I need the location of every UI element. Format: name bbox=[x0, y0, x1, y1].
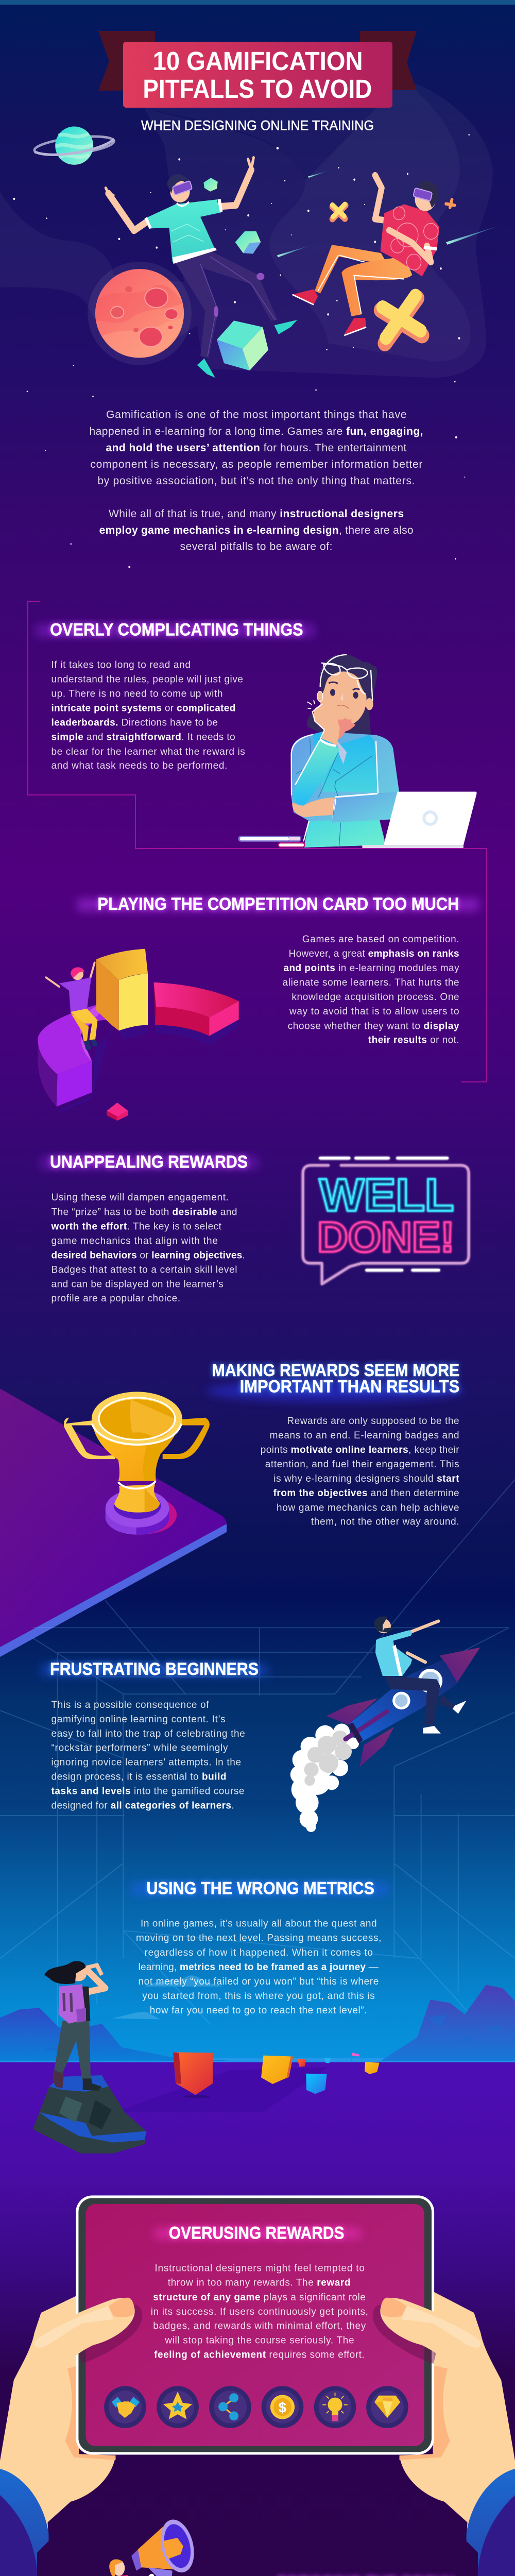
banner plate bbox=[123, 42, 392, 108]
text: using the wrong metrics: regardless of how it happened. When it comes to bbox=[145, 1947, 373, 1958]
text: unappealing rewards bbox=[50, 1192, 245, 1304]
text: competition card bbox=[282, 934, 459, 1046]
text: overly complicating things: intricate point systems or complicated bbox=[52, 703, 235, 714]
heading: playing the competition card: PLAYING THE COMPETITION CARD TOO MUCH bbox=[97, 894, 459, 914]
text: unappealing rewards: Using these will dampen engagement. bbox=[52, 1192, 229, 1203]
rider bbox=[438, 1694, 467, 1714]
text: frustrating beginners: design process, it is essential to build bbox=[52, 1772, 227, 1783]
text: unappealing rewards: Badges that attest to a certain skill level bbox=[52, 1264, 237, 1276]
landscape bbox=[0, 1985, 515, 2112]
platform: trophy stand bbox=[0, 1388, 227, 1657]
icon: diamond bbox=[366, 2386, 408, 2428]
yellow block bbox=[96, 949, 148, 1031]
text: frustrating beginners: This is a possible consequence of bbox=[52, 1700, 209, 1710]
text: making rewards: them, not the other way around. bbox=[311, 1517, 459, 1528]
intro text: Gamification is one of the most important things that have bbox=[106, 409, 407, 421]
mountains left bbox=[0, 2008, 230, 2061]
icon: light bulb bbox=[314, 2386, 356, 2428]
icon: handshake bbox=[104, 2386, 146, 2428]
text: unappealing rewards: profile are a popular choice. bbox=[52, 1293, 180, 1304]
text: making rewards: is why e-learning designers should start bbox=[273, 1473, 459, 1484]
text: making rewards: Rewards are only supposed to be the bbox=[287, 1416, 459, 1427]
text: overly complicating things: leaderboards. Directions have to be bbox=[52, 718, 218, 728]
text: making rewards: points motivate online learners, keep their bbox=[261, 1445, 459, 1455]
hero nebula and stars bbox=[0, 65, 493, 568]
text: overusing rewards: will stop taking the course seriously. The bbox=[164, 2335, 354, 2346]
text: using the wrong metrics bbox=[136, 1919, 381, 2016]
text: making rewards bbox=[261, 1416, 459, 1528]
purple block bbox=[38, 1001, 112, 1107]
text: overly complicating things: simple and straightforward. It needs to bbox=[52, 732, 235, 743]
tablet bbox=[76, 2195, 434, 2455]
text: competition card: choose whether they want to display bbox=[288, 1021, 459, 1031]
megaphone bbox=[131, 2516, 199, 2576]
intro text: employ game mechanics in e-learning design, there are also bbox=[99, 524, 414, 536]
figure bbox=[82, 1970, 105, 1993]
text: frustrating beginners: easy to fall into the trap of celebrating the bbox=[52, 1728, 245, 1739]
text: competition card: way to avoid that is to allow users to bbox=[289, 1006, 459, 1017]
rock bbox=[33, 2075, 146, 2154]
text: unappealing rewards: game mechanics that align with the bbox=[52, 1235, 218, 1246]
illustration: hand, left, back bbox=[0, 2295, 115, 2576]
planet: ringed bbox=[33, 127, 115, 165]
ribbon left bbox=[98, 31, 155, 91]
icon: coin: $ bbox=[279, 2399, 287, 2415]
rocket bbox=[326, 1698, 377, 1724]
person: red shirt VR bbox=[293, 175, 439, 335]
subtitle: WHEN DESIGNING ONLINE TRAINING bbox=[141, 117, 374, 133]
text: competition card: and points in e-learning modules may bbox=[283, 963, 459, 974]
illustration: rocket rider bbox=[290, 1616, 480, 1832]
heading: overly complicating things: OVERLY COMPLICATING THINGS bbox=[50, 620, 303, 639]
neon frame bbox=[303, 1165, 469, 1284]
text: using the wrong metrics: not merely “you failed or you won” but “this is where bbox=[138, 1976, 379, 1987]
text: overly complicating things: be clear for the learner what the reward is bbox=[52, 747, 245, 757]
illustration: chart blocks with person bbox=[38, 949, 239, 1112]
small pink cube bbox=[107, 1103, 128, 1121]
text: overusing rewards: badges, and rewards with minimal effort, they bbox=[153, 2320, 366, 2331]
neon dashes bbox=[320, 1158, 448, 1270]
text: making rewards: how game mechanics can help achieve bbox=[277, 1502, 459, 1513]
illustration: books and laptop bbox=[278, 792, 477, 848]
text: using the wrong metrics: learning, metrics need to be framed as a journey — bbox=[138, 1962, 379, 1973]
text: overusing rewards: Instructional designers might feel tempted to bbox=[154, 2263, 365, 2274]
text: frustrating beginners: ignoring novice learners’ attempts. In the bbox=[52, 1757, 241, 1768]
text: competition card: knowledge acquisition process. One bbox=[291, 992, 459, 1003]
person: teal shirt VR bbox=[106, 158, 297, 378]
text: competition card: However, a great emphasis on ranks bbox=[289, 948, 459, 959]
text: overly complicating things bbox=[52, 659, 245, 771]
text: overly complicating things: understand the rules, people will just give bbox=[52, 674, 243, 685]
badge: red bbox=[173, 2052, 213, 2098]
heading: frustrating beginners: FRUSTRATING BEGINNERS bbox=[50, 1659, 259, 1679]
heading: making rewards bbox=[206, 1361, 464, 1401]
text: competition card: alienate some learners. That hurts the bbox=[282, 977, 459, 988]
heading: unappealing rewards: UNAPPEALING REWARDS bbox=[50, 1152, 248, 1172]
illustration: woman with megaphone bbox=[107, 2516, 199, 2576]
pink block bbox=[153, 982, 239, 1036]
x shapes bbox=[332, 199, 455, 343]
text: unappealing rewards: The “prize” has to be both desirable and bbox=[52, 1207, 237, 1217]
intro text: component is necessary, as people remember information better bbox=[90, 459, 422, 470]
reward icons bbox=[104, 2386, 408, 2428]
text: frustrating beginners: “rockstar performers” while seemingly bbox=[52, 1742, 228, 1754]
text: frustrating beginners: gamifying online learning content. It’s bbox=[52, 1714, 226, 1725]
text: making rewards: attention, and fuel their engagement. This bbox=[265, 1459, 459, 1470]
icon: star bbox=[157, 2386, 199, 2428]
text: unappealing rewards: worth the effort. The key is to select bbox=[50, 1221, 222, 1232]
badge: blue bbox=[306, 2074, 327, 2094]
neon word: well: WELL bbox=[319, 1169, 454, 1221]
text: frustrating beginners: designed for all categories of learners. bbox=[52, 1801, 234, 1811]
icon: coin bbox=[262, 2386, 303, 2428]
small badges and flag bbox=[297, 2052, 380, 2074]
neon sign: well done bbox=[303, 1158, 469, 1284]
illustration: girl with backpack on rock bbox=[33, 1961, 146, 2154]
text: overly complicating things: If it takes too long to read and bbox=[52, 659, 191, 670]
ribbon right bbox=[360, 31, 417, 90]
person on blocks bbox=[46, 963, 98, 1050]
text: overusing rewards: feeling of achievement requires some effort. bbox=[154, 2349, 365, 2360]
smoke bbox=[290, 1724, 359, 1832]
intro text: and hold the users’ attention for hours. The entertainment bbox=[106, 442, 407, 454]
illustration: thinking woman with laptop bbox=[291, 655, 399, 848]
planet: mars bbox=[88, 262, 192, 365]
heading: overusing rewards: OVERUSING REWARDS bbox=[169, 2224, 344, 2243]
neon word: done: DONE! bbox=[317, 1213, 455, 1261]
text: using the wrong metrics: how far you need to go to reach the next level”. bbox=[150, 2005, 367, 2016]
block shadows bbox=[58, 1020, 238, 1112]
clouds bbox=[112, 1975, 224, 2020]
mountains right bbox=[381, 1985, 515, 2061]
text: unappealing rewards: desired behaviors or learning objectives. bbox=[52, 1250, 245, 1261]
title banner bbox=[98, 31, 417, 108]
text: using the wrong metrics: you started from, this is where you got, and this is bbox=[142, 1991, 375, 2002]
text: using the wrong metrics: In online games, it’s usually all about the quest and bbox=[141, 1919, 377, 1929]
book stack left bbox=[238, 836, 301, 842]
icon: share bbox=[209, 2386, 251, 2428]
hero illustration bbox=[33, 127, 499, 378]
text: using the wrong metrics: moving on to the next level. Passing means success, bbox=[136, 1933, 381, 1944]
text: frustrating beginners: tasks and levels into the gamified course bbox=[52, 1786, 244, 1797]
intro text: While all of that is true, and many instructional designers bbox=[109, 508, 404, 520]
heading: making rewards: MAKING REWARDS SEEM MORE bbox=[212, 1361, 459, 1380]
perspective grid lines bbox=[0, 1480, 515, 2074]
intro text bbox=[90, 409, 423, 553]
text: overusing rewards: in its success. If users continuously get points, bbox=[151, 2307, 368, 2317]
text: overusing rewards: throw in too many rewards. The reward bbox=[168, 2278, 350, 2289]
illustration: hand, right, back bbox=[400, 2292, 515, 2576]
meteors bbox=[277, 171, 499, 257]
badge: yellow bbox=[261, 2056, 293, 2084]
intro text: happened in e-learning for a long time. Games are fun, engaging, bbox=[90, 426, 423, 437]
intro text: by positive association, but it’s not the only thing that matters. bbox=[97, 475, 415, 487]
cubes bbox=[203, 178, 268, 370]
illustration: thumb right bbox=[373, 2298, 480, 2365]
heading: using the wrong metrics: USING THE WRONG METRICS bbox=[146, 1878, 374, 1898]
text: competition card: their results or not. bbox=[368, 1035, 459, 1046]
title: 10 GAMIFICATION bbox=[153, 46, 363, 76]
text: overusing rewards: structure of any game plays a significant role bbox=[153, 2292, 366, 2303]
text: overusing rewards bbox=[151, 2263, 368, 2360]
title banner: PITFALLS TO AVOID bbox=[143, 74, 372, 104]
text: unappealing rewards: and can be displayed on the learner’s bbox=[52, 1279, 224, 1290]
intro text: several pitfalls to be aware of: bbox=[180, 541, 333, 553]
frame lines bbox=[28, 602, 486, 1082]
illustration: thumb left bbox=[35, 2298, 142, 2365]
text: overly complicating things: and what task needs to be performed. bbox=[52, 760, 227, 771]
heading: making rewards: IMPORTANT THAN RESULTS bbox=[240, 1377, 459, 1397]
illustration: trophy bbox=[64, 1392, 210, 1535]
text: making rewards: means to an end. E-learning badges and bbox=[270, 1430, 459, 1441]
text: frustrating beginners bbox=[52, 1700, 245, 1811]
text: making rewards: from the objectives and then determine bbox=[273, 1488, 459, 1499]
text: overly complicating things: up. There is no need to come up with bbox=[52, 689, 222, 700]
text: competition card: Games are based on competition. bbox=[302, 934, 459, 945]
